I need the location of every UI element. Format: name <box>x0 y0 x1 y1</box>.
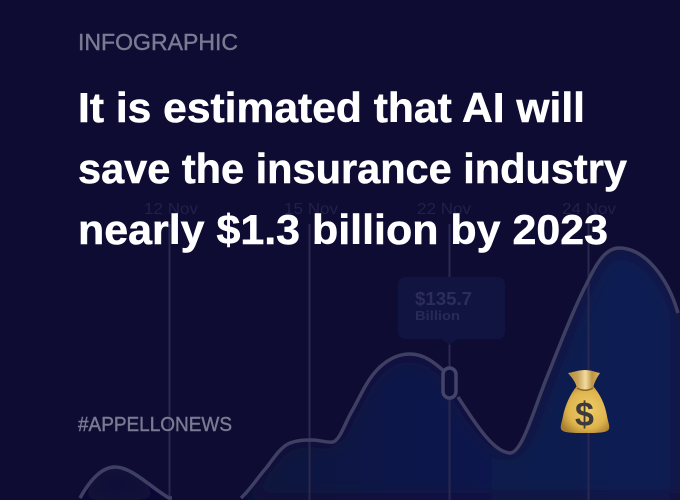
tooltip <box>398 277 505 345</box>
date labels: 12 Nov <box>144 201 198 218</box>
date labels: 15 Nov <box>284 201 338 218</box>
gridlines <box>170 224 588 500</box>
title <box>78 84 628 253</box>
area chart <box>80 201 680 500</box>
date labels: 22 Nov <box>417 201 471 218</box>
chart line <box>80 248 678 498</box>
title: nearly $1.3 billion by 2023 <box>78 206 608 253</box>
icon: money bag: $ <box>575 396 594 434</box>
chart marker <box>443 368 456 398</box>
tooltip: $135.7 <box>415 289 472 309</box>
tooltip: Billion <box>415 308 460 323</box>
title: save the insurance industry <box>78 145 628 192</box>
category label: INFOGRAPHIC <box>78 29 238 55</box>
hashtag: #APPELLONEWS <box>78 414 232 436</box>
icon: money bag <box>561 370 609 434</box>
title: It is estimated that AI will <box>78 84 585 131</box>
date labels: 24 Nov <box>562 201 616 218</box>
chart area fill <box>258 250 680 500</box>
date labels <box>144 201 616 218</box>
